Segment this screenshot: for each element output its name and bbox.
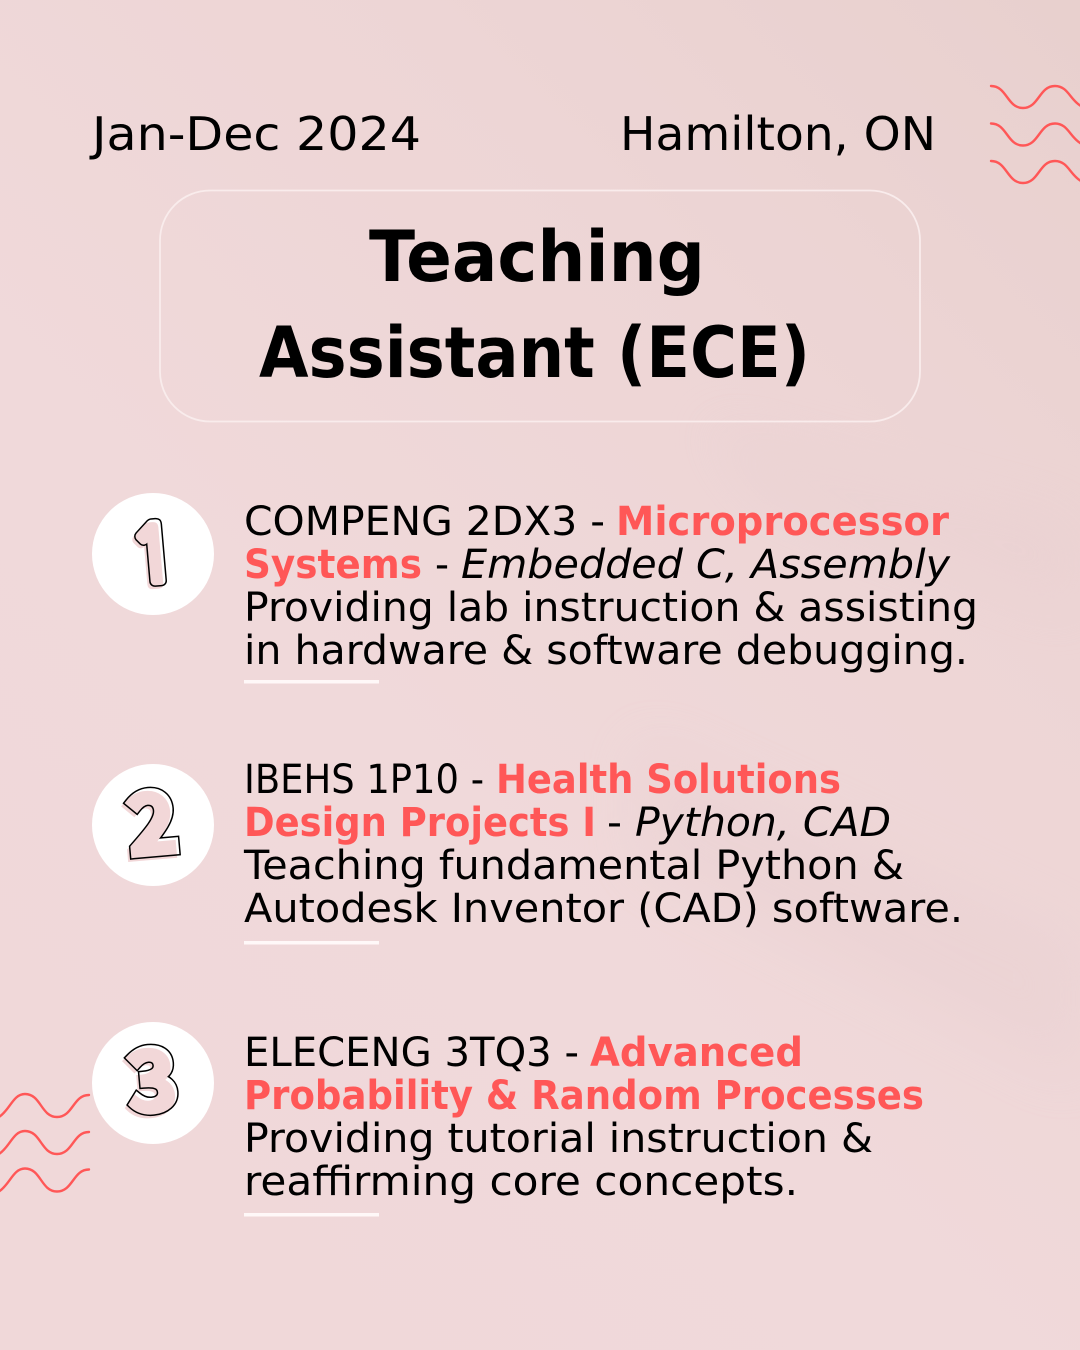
item 1 number badge (92, 493, 214, 615)
item 1 text: Microprocessor (616, 499, 949, 545)
title panel (160, 190, 920, 422)
location: Hamilton, ON (620, 107, 936, 161)
item 1 text: - (435, 542, 449, 588)
item 2 text: IBEHS 1P10 - (244, 757, 484, 803)
item 1 text: Embedded C, Assembly (461, 542, 951, 588)
item 2 text: Health Solutions (496, 757, 841, 803)
item 2 number badge: 2 (120, 758, 180, 883)
item 3 text: ELECENG 3TQ3 - (244, 1030, 579, 1076)
item 2 text: Teaching fundamental Python & (243, 843, 904, 889)
title line 1: Teaching (369, 216, 705, 298)
item 3 number badge (92, 1012, 214, 1144)
item 3 underline (244, 1213, 379, 1216)
item 1 text: COMPENG 2DX3 - (244, 499, 605, 545)
item 3 number badge: 3 (122, 1012, 182, 1137)
decorative waves: bottom left (0, 1094, 89, 1192)
date: Jan-Dec 2024 (89, 107, 421, 161)
item 3 text: reaffirming core concepts. (244, 1159, 798, 1205)
item 2 number badge: 2 (122, 755, 182, 880)
item 2 number badge (92, 755, 214, 886)
item 3 text: Advanced (590, 1030, 803, 1076)
title line 2: Assistant (ECE) (259, 312, 810, 394)
item 1 underline (244, 680, 379, 684)
item 2 underline (244, 941, 379, 944)
decorative waves: top right (991, 86, 1080, 183)
item 3 text: Providing tutorial instruction & (244, 1116, 873, 1162)
item 1 text: Systems (244, 542, 422, 588)
item 2 text: Design Projects I (244, 800, 596, 846)
item 2 text: - (607, 800, 622, 846)
item 2 text: Python, CAD (635, 800, 891, 846)
item 1 number badge: 1 (127, 514, 181, 596)
item 3 text (244, 1030, 924, 1205)
item 2 text: Autodesk Inventor (CAD) software. (244, 886, 963, 932)
item 3 text: Probability & Random Processes (244, 1073, 924, 1119)
item 1 text (244, 499, 978, 674)
item 2 text (243, 757, 963, 932)
item 3 number badge: 3 (120, 1015, 179, 1140)
item 1 number badge: 1 (124, 517, 178, 599)
item 1 text: Providing lab instruction & assisting (244, 585, 978, 631)
item 1 text: in hardware & software debugging. (244, 628, 968, 674)
title box outline (160, 190, 920, 422)
